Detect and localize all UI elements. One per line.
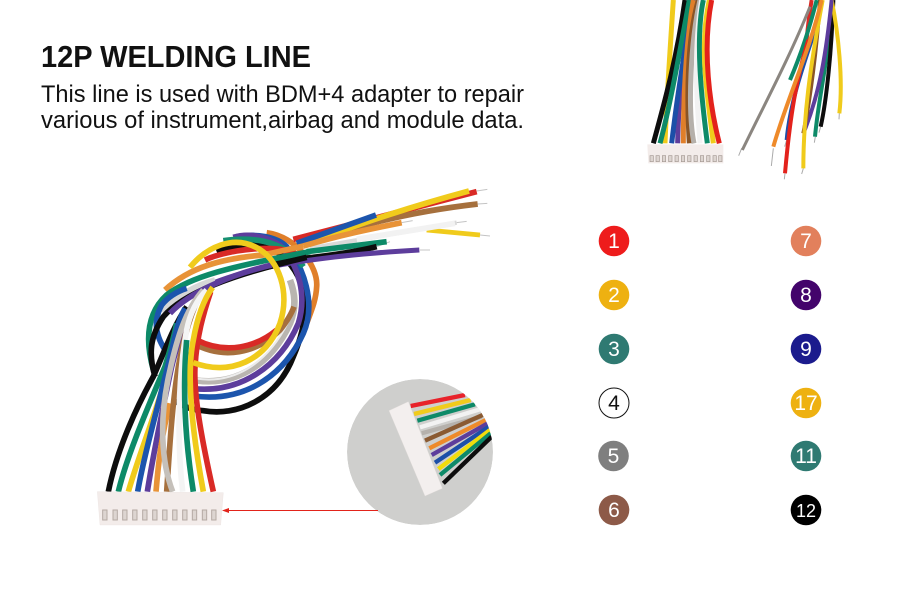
top-right wire photos [647,0,841,179]
legend item 4 [599,388,629,418]
legend item 3: 3 [608,338,620,361]
legend item 7 [791,226,821,256]
main wire harness photo [97,189,490,525]
left wire bundle [653,0,719,143]
legend item 7: 7 [800,230,812,253]
legend item 11: 11 [795,445,817,468]
legend item 2 [599,280,629,310]
legend item 17 [791,388,821,418]
legend item 11 [791,441,821,471]
legend item 2: 2 [608,284,620,307]
description text: This line is used with BDM+4 adapter to repair [41,81,524,108]
legend item 9: 9 [800,338,812,361]
legend item 5 [598,441,629,471]
description text [41,81,524,134]
strands from connector [108,307,187,492]
legend item 8 [791,280,821,310]
yellow loop [190,242,284,368]
title: 12P WELDING LINE [41,39,311,74]
legend item 8: 8 [800,284,812,307]
colour legend [598,226,821,525]
right-hand strand ends [293,192,477,239]
legend item 17: 17 [794,392,818,415]
wire tips [377,189,490,250]
legend item 3 [599,334,629,364]
right wire bundle [739,0,841,179]
legend item 9 [791,334,821,364]
description text: various of instrument,airbag and module data. [41,107,524,134]
legend item 12: 12 [796,501,816,521]
legend item 6 [599,495,629,525]
legend item 12 [791,495,821,525]
inset detail circle [347,379,493,525]
legend item 1 [599,226,629,256]
red arrow pointing to connector [222,508,378,513]
legend item 1: 1 [608,230,620,253]
legend item 5: 5 [608,445,619,468]
connector [97,492,223,525]
legend item 4: 4 [608,392,620,415]
legend item 6: 6 [608,499,620,522]
strands across knot [165,246,303,290]
